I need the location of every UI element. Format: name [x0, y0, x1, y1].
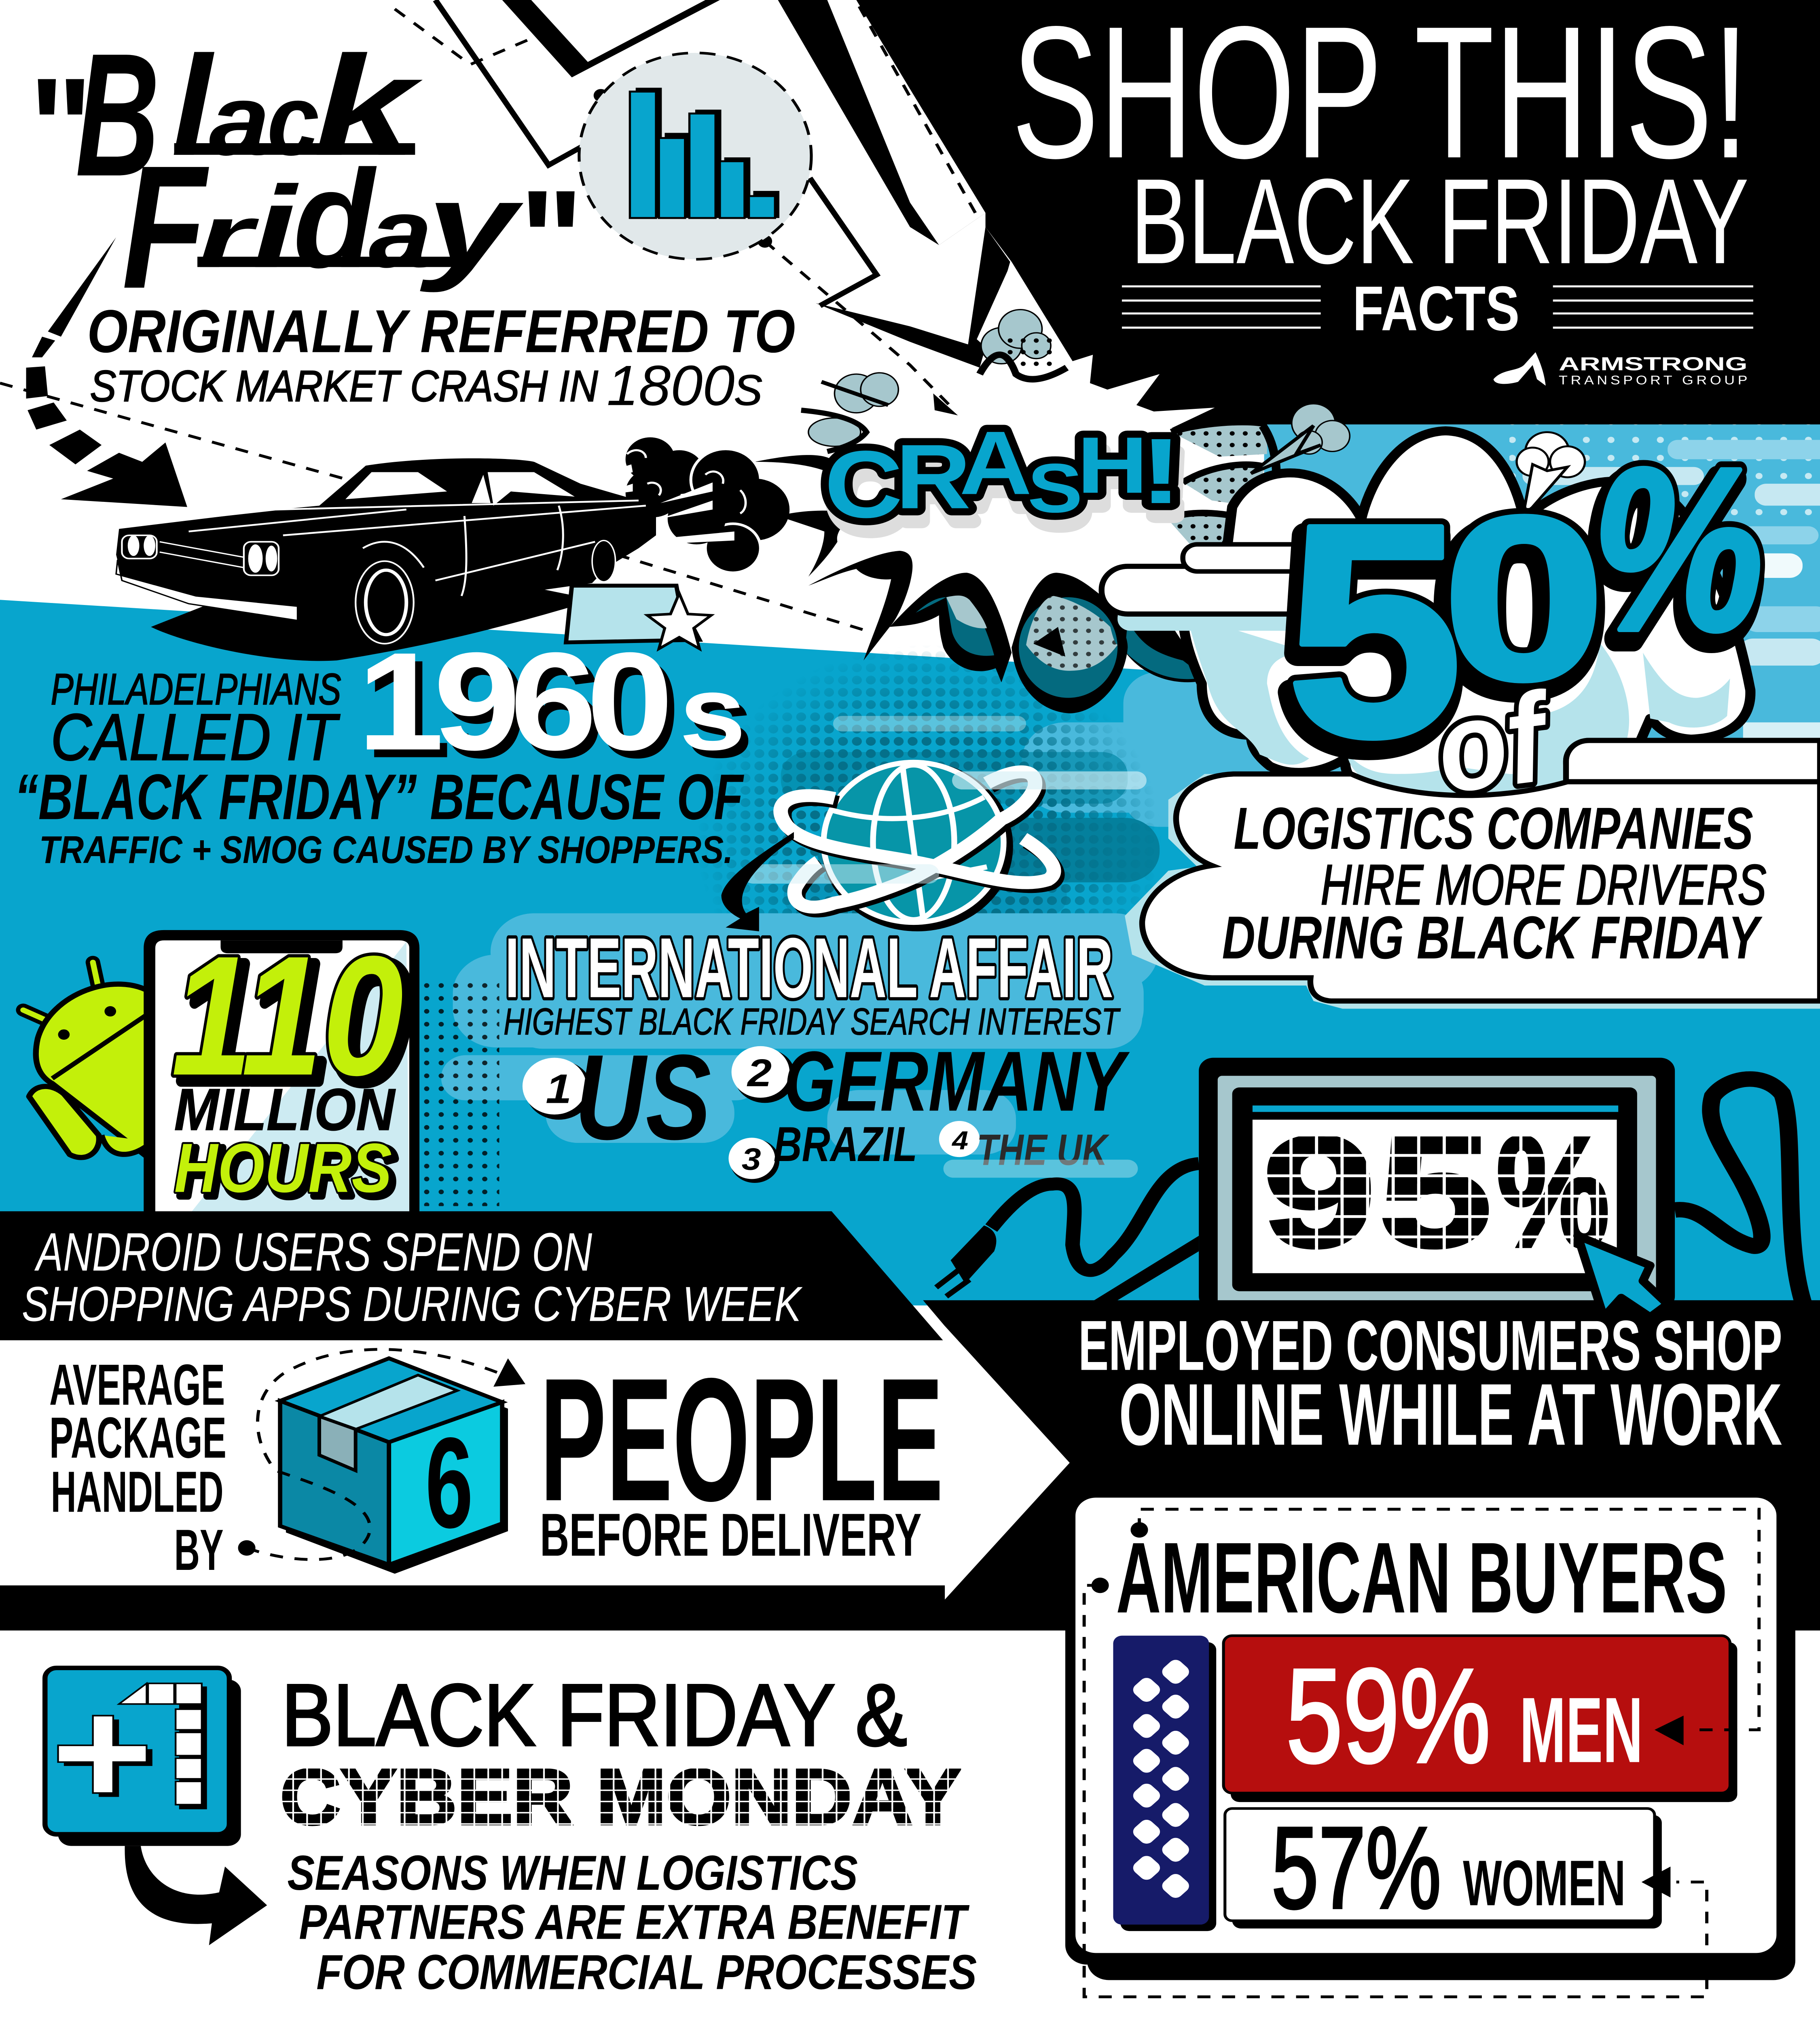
stat: 50%: 0: [1443, 468, 1605, 728]
text: 1960s: 1960: [357, 623, 673, 779]
text: black friday and cyber monday: [280, 1666, 977, 2000]
arrow from globe: [721, 832, 794, 931]
title: Black Friday: F: [122, 129, 210, 325]
flag stripe with diamonds: [1113, 1636, 1216, 1931]
crash word: S: [1028, 449, 1083, 527]
text: Philadelphians: PHILADELPHIANS: [51, 665, 341, 714]
logo: Armstrong Transport Group: TRANSPORT GROUP: [1559, 373, 1748, 387]
title: Black Friday: y: [419, 157, 525, 294]
text: Philadelphians: [15, 665, 744, 871]
title: Black Friday: d: [293, 141, 379, 297]
lobe 1: [890, 573, 1012, 682]
title: Black Friday: k: [313, 27, 425, 185]
text: average package handled by: BY: [174, 1518, 224, 1582]
ranking list: GERMANY: [784, 1034, 1130, 1129]
state map with star: [566, 586, 711, 649]
text: 1960s: 1960: [364, 631, 681, 787]
subtitle text: ORIGINALLY REFERRED TO: [87, 298, 796, 365]
crash word: A: [964, 426, 1036, 527]
stat: 50%: 5: [1286, 461, 1463, 800]
crash word: S: [1032, 462, 1087, 540]
crash word: A: [959, 413, 1032, 514]
text: average package handled by: AVERAGE: [49, 1353, 225, 1417]
black right panel: [0, 1300, 1820, 1631]
bar: 59% men: MEN: [1519, 1678, 1643, 1782]
heading: International Affair: [504, 920, 1121, 1043]
subtitle text: STOCK MARKET CRASH IN: [90, 362, 598, 411]
text: average package handled by: PACKAGE: [49, 1406, 226, 1470]
ranking list: 1: [546, 1066, 571, 1112]
text: 1960s: s: [679, 654, 746, 772]
title: Black Friday: [29, 17, 584, 325]
title: Black Friday: c: [267, 64, 319, 176]
title: Black Friday: l: [171, 27, 215, 185]
icon: monitor with 95%: [936, 1058, 1804, 1309]
logo: Armstrong Transport Group: ARMSTRONG: [1559, 353, 1748, 374]
text: average package handled by: HANDLED: [51, 1460, 224, 1524]
crash word: H: [1081, 433, 1152, 523]
bar: 59% men: [1223, 1636, 1737, 1802]
phone with 110 million hours: 110: [171, 920, 404, 1110]
phone with 110 million hours: MILLION: [174, 1077, 396, 1143]
stat: 50%: %: [1588, 428, 1759, 688]
crash starburst spikes and lobes: [755, 455, 1208, 713]
title: Black Friday: ": [29, 49, 93, 207]
phone with 110 million hours: [144, 920, 419, 1219]
ranking list: [523, 1029, 1138, 1183]
text: Philadelphians: TRAFFIC + SMOG CAUSED BY SHOPPERS.: [39, 828, 733, 871]
stat: 50%: %: [1592, 419, 1763, 679]
bar: 57% women: 57%: [1272, 1802, 1441, 1933]
subtitle text: [87, 298, 796, 417]
big zig-zag arrow: [395, 0, 1010, 415]
phone with 110 million hours: HOURS: [174, 1129, 392, 1207]
title: Black Friday: r: [197, 186, 259, 286]
text: black friday and cyber monday: PARTNERS ARE EXTRA BENEFIT: [299, 1895, 969, 1950]
bar: 57% women: [1225, 1802, 1662, 1933]
text: Philadelphians: “BLACK FRIDAY” BECAUSE OF: [15, 761, 744, 833]
ranking list: 4: [951, 1127, 968, 1155]
crash word: !: [1139, 419, 1183, 523]
text: people before delivery: [540, 1341, 944, 1569]
illustration: car: [116, 458, 656, 661]
lobe 2: [1012, 573, 1128, 713]
text: 1960s: s: [686, 662, 753, 780]
panel: american buyers: [1065, 1497, 1795, 1980]
crash word: C: [824, 431, 903, 538]
halftone and pills behind globe: [713, 651, 1160, 915]
pills behind international affair: [441, 913, 1158, 1155]
logo: Armstrong Transport Group: [1494, 352, 1748, 387]
dashed connector: women: [1084, 1578, 1707, 1997]
pale pills over globe: [743, 771, 1147, 884]
stat: 50%: 5: [1286, 461, 1463, 800]
icon: package box: [238, 1349, 525, 1574]
title: Black Friday: ": [520, 161, 584, 319]
smoke cloud behind car: [580, 436, 789, 573]
title: Black Friday: B: [76, 17, 160, 213]
title: Black Friday: a: [209, 64, 270, 176]
black band: android text: ANDROID USERS SPEND ON: [34, 1222, 593, 1282]
crash word: H: [1077, 420, 1148, 510]
text: black friday and cyber monday: SEASONS WHEN LOGISTICS: [288, 1846, 858, 1900]
text: black friday and cyber monday: CYBER MONDAY: [280, 1753, 961, 1841]
icon: globe: [781, 760, 1058, 931]
crash word: S: [1028, 449, 1083, 527]
text: black friday and cyber monday: FOR COMMERCIAL PROCESSES: [316, 1945, 977, 2000]
black header panel: [856, 0, 1820, 428]
text: Philadelphians: CALLED IT: [51, 700, 340, 774]
icon: monitor with 95%: 9: [1263, 1104, 1376, 1280]
panel: +1 icon: [45, 1668, 241, 1846]
ranking list: 2: [747, 1051, 772, 1094]
crash word: !: [1144, 432, 1187, 536]
panel: big cloud: [1183, 431, 1750, 805]
stat: 50%: 5: [1282, 470, 1458, 809]
subtitle text: 1800s: [607, 354, 764, 417]
dashed connector: men: [1130, 1509, 1759, 1745]
text: average package handled by: [49, 1353, 226, 1582]
icon: monitor with 95%: 5: [1379, 1104, 1492, 1280]
ranking list: BRAZIL: [774, 1117, 917, 1172]
word: of: of: [1426, 665, 1565, 820]
white pills on cloud: [1102, 544, 1820, 787]
crash word: A: [959, 413, 1032, 514]
gray halftone lobes: [1168, 422, 1276, 544]
smoke puffs: [801, 310, 1585, 518]
white arrow panel: package: [0, 1326, 1070, 1599]
header title: [1012, 0, 1753, 344]
title: Black Friday: i: [252, 162, 299, 292]
thick dashed curved arrow: [26, 237, 187, 507]
dashed diagonal line: [0, 383, 871, 632]
stat: 50%: 0: [1438, 478, 1601, 737]
bar chart circle icon: [579, 53, 811, 259]
black band: android text: [0, 1211, 946, 1344]
ranking list: US: [575, 1029, 712, 1165]
crash word: H: [1077, 420, 1148, 510]
icon: monitor with 95%: %: [1496, 1104, 1610, 1280]
ranking list: THE UK: [977, 1126, 1110, 1174]
halftone dots near phone: [419, 980, 499, 1206]
heading: International Affair: HIGHEST BLACK FRIDAY SEARCH INTEREST: [504, 1001, 1121, 1043]
title: Black Friday: a: [368, 178, 432, 288]
header title: FACTS: [1352, 273, 1519, 344]
heading: International Affair: INTERNATIONAL AFFAIR: [505, 920, 1113, 1015]
cursor: [1578, 1236, 1668, 1317]
black band: android text: SHOPPING APPS DURING CYBER WEEK: [22, 1277, 803, 1332]
bar: 57% women: WOMEN: [1463, 1847, 1625, 1919]
crash word: !: [1139, 419, 1183, 523]
crash word: R: [895, 426, 971, 528]
crash word: R: [900, 439, 975, 541]
crash word: C: [829, 444, 907, 551]
text: employed consumers: [1078, 1306, 1782, 1464]
phone with 110 million hours: 110: [178, 927, 411, 1117]
stat: 50%: %: [1592, 419, 1763, 679]
crash word: C: [824, 431, 903, 538]
stat: 50%: 0: [1443, 468, 1605, 728]
text: people before delivery: BEFORE DELIVERY: [540, 1501, 922, 1569]
speech bubble: logistics: [1125, 740, 1820, 1009]
text: people before delivery: PEOPLE: [540, 1341, 944, 1538]
lobe 3: [1097, 597, 1208, 682]
blue background: [0, 424, 1820, 1305]
curved arrow: [125, 1846, 267, 1945]
bar: 59% men: 59%: [1286, 1641, 1490, 1791]
white arrow sliver: [977, 262, 1073, 374]
icon: android: [23, 962, 152, 1161]
crash word: R: [895, 426, 971, 528]
icon: package box: 6: [425, 1411, 473, 1555]
ranking list: 3: [742, 1142, 761, 1177]
crash word: [824, 413, 1187, 551]
stat: 50%: [1282, 419, 1763, 809]
text: black friday and cyber monday: BLACK FRIDAY &: [281, 1666, 907, 1764]
phone with 110 million hours: HOURS: [178, 1133, 396, 1211]
